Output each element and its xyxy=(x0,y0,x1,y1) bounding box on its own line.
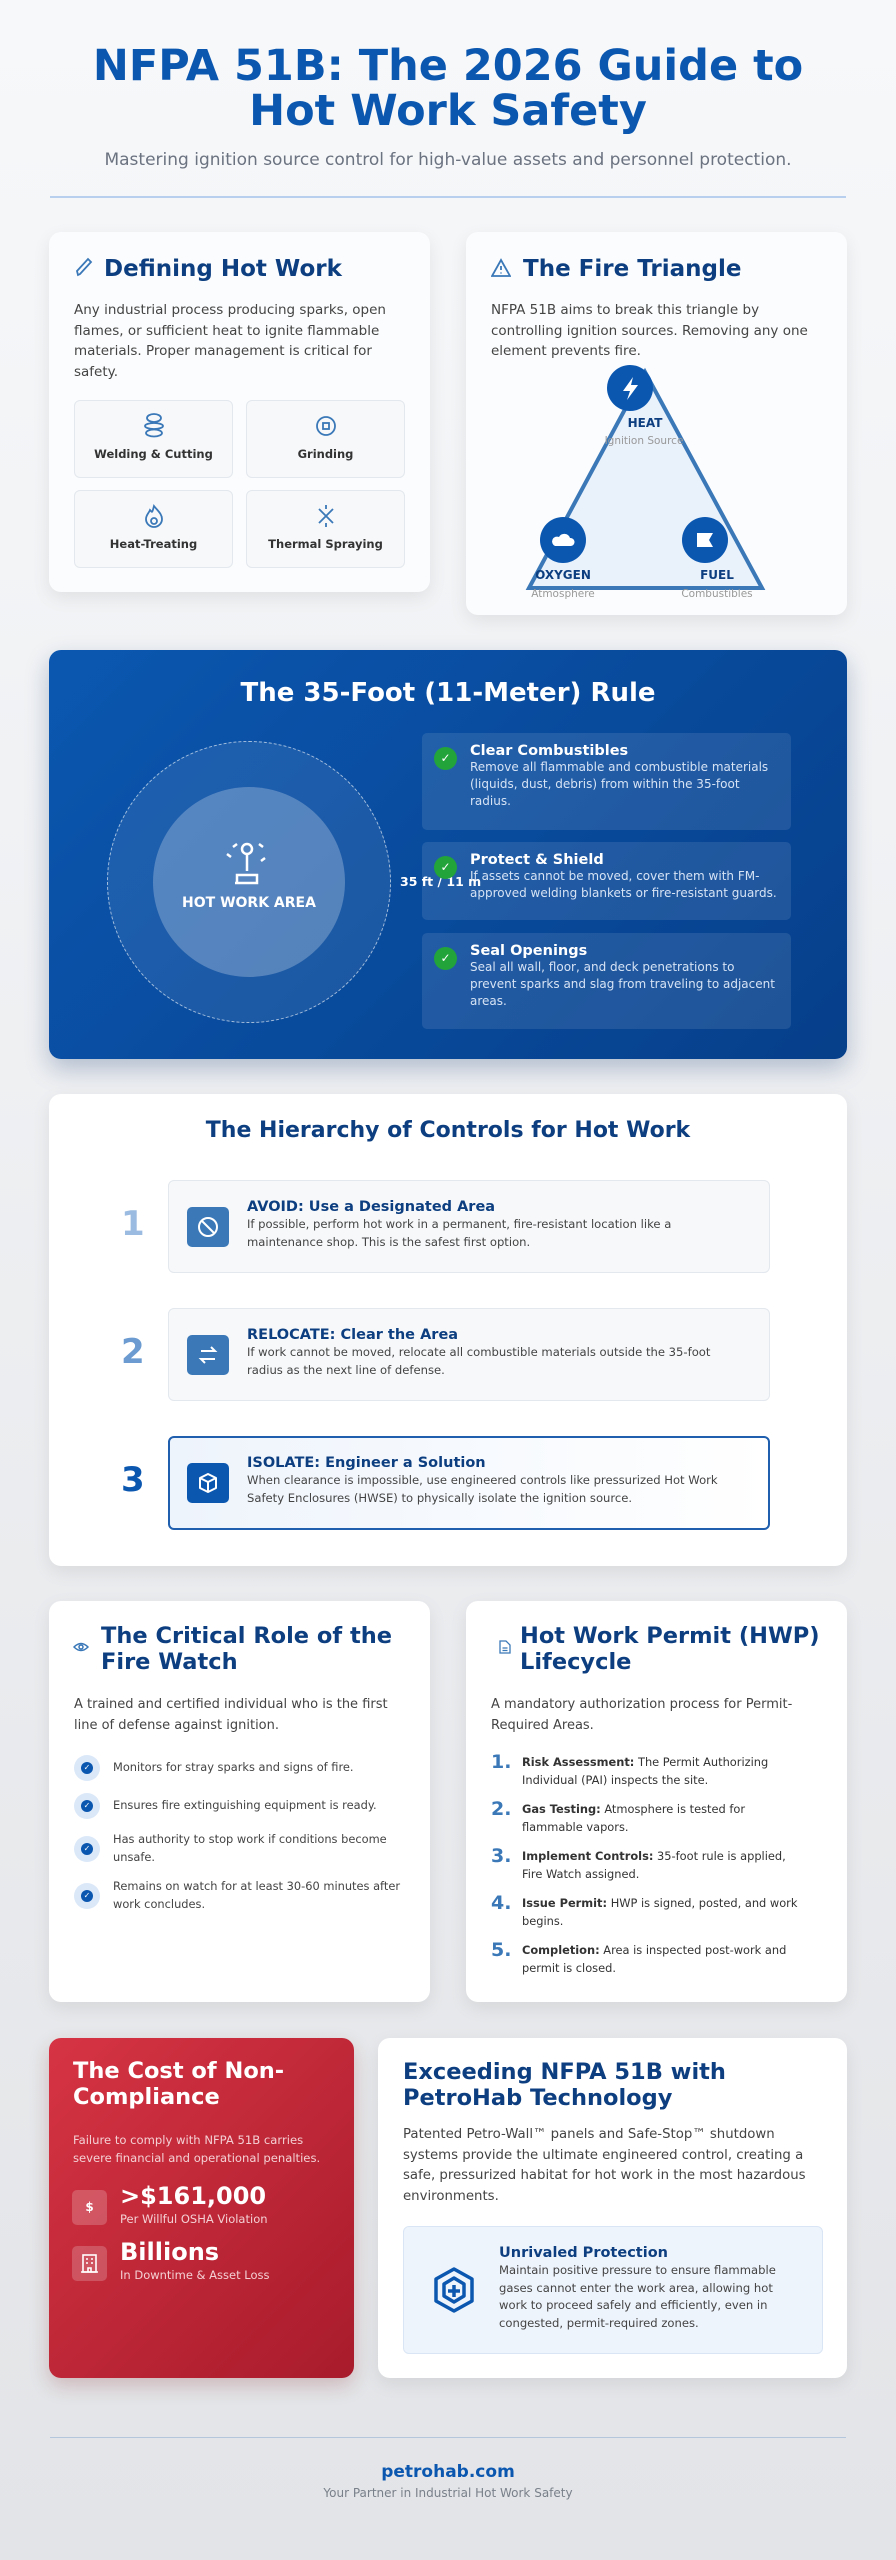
title xyxy=(93,41,803,136)
footer: petrohab.com xyxy=(381,2462,515,2482)
icon: shield hexagon xyxy=(434,2267,474,2313)
row: avoid: 1 xyxy=(121,1204,145,1244)
chart: fire triangle diagram: HEAT xyxy=(628,416,663,430)
list: fire watch duties: Monitors for stray sparks and signs of fire. xyxy=(113,1760,354,1774)
list: permit steps: 4. xyxy=(491,1892,511,1914)
chart: fire triangle diagram: Atmosphere xyxy=(531,588,595,600)
heading: petrohab: Exceeding NFPA 51B with PetroHab Technology xyxy=(403,2059,726,2111)
list: permit steps: Risk Assessment: The Permit Authorizing Individual (PAI) inspects the site. xyxy=(522,1755,768,1786)
panel: 35-foot rule xyxy=(49,650,847,1059)
stat: OSHA fine xyxy=(72,2182,268,2226)
item: clear combustibles: ✓ xyxy=(440,751,451,765)
text: definition: Any industrial process producing sparks, open flames, or sufficient heat to ignite flammable materials. Proper management is critical for safety. xyxy=(74,302,386,380)
list: permit steps: Completion: Area is inspected post-work and permit is closed. xyxy=(522,1943,786,1974)
item: clear combustibles: Clear Combustibles xyxy=(470,743,628,759)
panel: hierarchy of controls xyxy=(49,1094,847,1566)
heading: fire triangle: The Fire Triangle xyxy=(523,256,741,282)
row: relocate xyxy=(121,1308,770,1401)
item: protect and shield xyxy=(422,842,791,920)
list: fire watch duties: ✓ xyxy=(84,1763,90,1772)
list: permit steps: 3. xyxy=(491,1845,511,1867)
panel: permit lifecycle xyxy=(466,1601,847,2002)
stat: billions: Billions xyxy=(120,2238,219,2266)
label: radius: 35 ft / 11 m xyxy=(400,874,481,889)
heading: cost: The Cost of Non-Compliance xyxy=(73,2058,284,2110)
list: fire watch duties: ✓ xyxy=(84,1801,90,1810)
footer xyxy=(323,2462,573,2500)
stat: billions: In Downtime & Asset Loss xyxy=(120,2268,270,2282)
list: permit steps: 5. xyxy=(491,1939,511,1961)
item: seal openings: ✓ xyxy=(440,951,451,965)
panel: fire watch xyxy=(49,1601,430,2002)
text: permit intro: A mandatory authorization process for Permit-Required Areas. xyxy=(491,1697,792,1732)
tile: welding xyxy=(74,400,233,478)
footer: Your Partner in Industrial Hot Work Safety xyxy=(323,2486,573,2500)
diagram: hot work area radius xyxy=(107,741,391,1023)
item: seal openings xyxy=(422,933,791,1029)
panel: fire triangle xyxy=(466,232,847,615)
list: permit steps: Gas Testing: Atmosphere is tested for flammable vapors. xyxy=(522,1802,745,1834)
item: clear combustibles xyxy=(422,733,791,830)
row: avoid xyxy=(121,1180,770,1273)
panel: defining hot work xyxy=(49,232,430,592)
row: avoid: AVOID: Use a Designated Area xyxy=(247,1199,495,1215)
row: isolate: When clearance is impossible, use engineered controls like pressurized Hot Work Safety Enclosures (HWSE) to physically isolate the ignition source. xyxy=(247,1473,718,1504)
heading: hierarchy: The Hierarchy of Controls for Hot Work xyxy=(206,1118,690,1143)
row: relocate: If work cannot be moved, relocate all combustible materials outside the 35-foot radius as the next line of defense. xyxy=(247,1345,710,1376)
row: isolate: ISOLATE: Engineer a Solution xyxy=(247,1455,486,1471)
tile: grinding xyxy=(246,400,405,478)
chart: fire triangle diagram: FUEL xyxy=(700,568,734,582)
heading: fire watch: The Critical Role of the Fire Watch xyxy=(101,1623,392,1675)
callout: unrivaled protection xyxy=(403,2226,823,2354)
tile: grinding: Grinding xyxy=(298,447,353,461)
list: fire watch duties: Remains on watch for at least 30-60 minutes after work concludes. xyxy=(113,1879,400,1910)
stat: OSHA fine: $ xyxy=(85,2200,94,2214)
heading: permit: Hot Work Permit (HWP) Lifecycle xyxy=(520,1623,820,1675)
chart: fire triangle diagram: Ignition Source xyxy=(605,435,683,447)
list: fire watch duties: ✓ xyxy=(84,1844,90,1853)
item: protect and shield: Protect & Shield xyxy=(470,852,604,868)
stat: OSHA fine: >$161,000 xyxy=(120,2182,266,2210)
icon: heat xyxy=(607,365,653,411)
list: permit steps: Issue Permit: HWP is signed, posted, and work begins. xyxy=(522,1896,797,1928)
list: permit steps: Implement Controls: 35-foot rule is applied, Fire Watch assigned. xyxy=(522,1849,786,1880)
list: fire watch duties xyxy=(74,1755,400,1910)
item: seal openings: Seal all wall, floor, and deck penetrations to prevent sparks and slag from traveling to adjacent areas. xyxy=(470,960,775,1008)
heading: 35-foot rule: The 35-Foot (11-Meter) Rule xyxy=(240,678,656,708)
subtitle: Mastering ignition source control for high-value assets and personnel protection. xyxy=(104,150,792,170)
icon: oxygen xyxy=(540,517,586,563)
panel: cost of non-compliance xyxy=(49,2038,354,2378)
item: clear combustibles: Remove all flammable and combustible materials (liquids, dust, debris) from within the 35-foot radius. xyxy=(470,760,768,808)
stat: OSHA fine: Per Willful OSHA Violation xyxy=(120,2212,268,2226)
list: fire watch duties: Ensures fire extinguishing equipment is ready. xyxy=(113,1798,377,1812)
stat: billions xyxy=(72,2238,270,2282)
tile: heat-treating: Heat-Treating xyxy=(110,537,197,551)
panel: petrohab technology xyxy=(378,2038,847,2378)
row: relocate: RELOCATE: Clear the Area xyxy=(247,1327,458,1343)
title: Hot Work Safety xyxy=(249,86,647,136)
row: isolate: 3 xyxy=(121,1460,145,1500)
text: petrohab intro: Patented Petro-Wall™ panels and Safe-Stop™ shutdown systems provide the ultimate engineered control, creating a safe, pressurized habitat for hot work in the most hazardous environments. xyxy=(403,2127,806,2204)
list: permit steps xyxy=(491,1751,798,1974)
icon: fuel xyxy=(682,517,728,563)
list: permit steps: 1. xyxy=(491,1751,511,1773)
row: isolate xyxy=(121,1436,770,1530)
chart: fire triangle diagram: Combustibles xyxy=(681,588,753,600)
tile: heat-treating xyxy=(74,490,233,568)
chart: fire triangle diagram: OXYGEN xyxy=(535,568,591,582)
text: triangle intro: NFPA 51B aims to break this triangle by controlling ignition sources. Removing any one element prevents fire. xyxy=(491,302,808,359)
title: NFPA 51B: The 2026 Guide to xyxy=(93,41,803,91)
row: relocate: 2 xyxy=(121,1332,145,1372)
callout: unrivaled protection: Unrivaled Protection xyxy=(499,2245,668,2261)
heading: defining hot work: Defining Hot Work xyxy=(104,256,342,282)
text: fire watch intro: A trained and certified individual who is the first line of defense against ignition. xyxy=(74,1697,388,1732)
item: protect and shield: If assets cannot be moved, cover them with FM-approved welding blankets or fire-resistant guards. xyxy=(470,869,777,900)
diagram: hot work area radius: HOT WORK AREA xyxy=(182,895,316,911)
list: fire watch duties: Has authority to stop work if conditions become unsafe. xyxy=(113,1832,387,1864)
callout: unrivaled protection: Maintain positive pressure to ensure flammable gases cannot enter the work area, allowing hot work to proceed safely and efficiently, even in congested, permit-required zones. xyxy=(499,2263,776,2330)
chart: fire triangle diagram xyxy=(526,365,766,600)
list: fire watch duties: ✓ xyxy=(84,1891,90,1900)
row: avoid: If possible, perform hot work in a permanent, fire-resistant location like a maintenance shop. This is the safest first option. xyxy=(247,1217,671,1248)
item: protect and shield: ✓ xyxy=(440,860,451,874)
tile: thermal spraying xyxy=(246,490,405,568)
list: permit steps: 2. xyxy=(491,1798,511,1820)
tile: welding: Welding & Cutting xyxy=(94,447,213,461)
text: cost intro: Failure to comply with NFPA 51B carries severe financial and operational penalties. xyxy=(73,2133,320,2164)
item: seal openings: Seal Openings xyxy=(470,943,587,959)
tile: thermal spraying: Thermal Spraying xyxy=(268,537,383,551)
